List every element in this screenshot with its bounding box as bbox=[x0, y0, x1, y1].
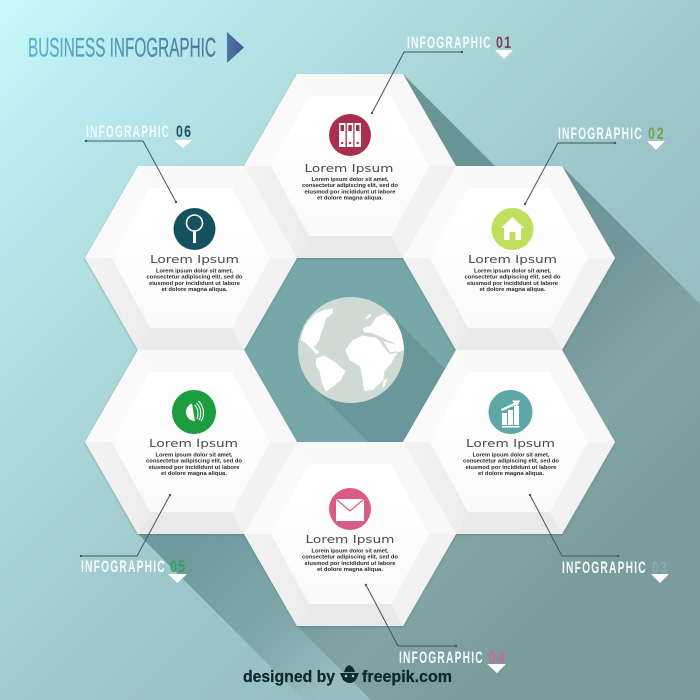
panel 5 bbox=[146, 390, 243, 477]
body text bbox=[464, 268, 561, 293]
panel 2 bbox=[464, 208, 561, 293]
body text: et dolore magna aliqua. bbox=[480, 287, 546, 293]
body text: consectetur adipiscing elit, sed do bbox=[302, 183, 399, 189]
hexagon 3 bbox=[403, 350, 615, 534]
callout 05: INFOGRAPHIC bbox=[81, 558, 165, 576]
callout 05 bbox=[80, 494, 187, 583]
callout 01: INFOGRAPHIC bbox=[407, 34, 491, 52]
body text: consectetur adipiscing elit, sed do bbox=[146, 275, 243, 281]
callout 02 bbox=[524, 125, 665, 205]
body text: eiusmod por incididunt ut labore bbox=[467, 281, 558, 287]
callout 06: 06 bbox=[176, 123, 191, 142]
body text: eiusmod por incididunt ut labore bbox=[148, 465, 240, 471]
body text bbox=[463, 452, 560, 477]
callout 01 bbox=[371, 34, 513, 114]
long shadow: main bbox=[297, 74, 700, 700]
body text: et dolore magna aliqua. bbox=[478, 471, 545, 477]
body text: eiusmod por incididunt ut labore bbox=[304, 561, 396, 567]
body text: Lorem ipsum dolor sit amet, bbox=[474, 268, 552, 274]
heading: Lorem Ipsum bbox=[304, 162, 394, 175]
icon: envelope bbox=[329, 488, 371, 530]
callout 03: 03 bbox=[652, 559, 667, 578]
hexagon 2 bbox=[403, 166, 615, 350]
callout 06 bbox=[85, 123, 192, 203]
body text bbox=[146, 452, 243, 477]
body text bbox=[302, 177, 399, 202]
footer credit bbox=[243, 665, 452, 686]
icon: magnifier bbox=[174, 208, 216, 250]
body text: Lorem ipsum dolor sit amet, bbox=[156, 452, 233, 458]
body text: consectetur adipiscing elit, sed do bbox=[302, 555, 399, 561]
body text: eiusmod por incididunt ut labore bbox=[304, 189, 396, 195]
body text: consectetur adipiscing elit, sed do bbox=[464, 275, 561, 281]
body text: Lorem ipsum dolor sit amet, bbox=[156, 268, 234, 274]
title: BUSINESS INFOGRAPHIC bbox=[28, 32, 216, 62]
icon: house bbox=[492, 208, 534, 250]
body text: Lorem ipsum dolor sit amet, bbox=[472, 452, 550, 458]
hexagon 5 bbox=[85, 350, 297, 534]
long shadow: left tail bbox=[138, 534, 371, 700]
footer credit: designed by bbox=[243, 667, 336, 686]
body text: et dolore magna aliqua. bbox=[317, 567, 384, 573]
body text: consectetur adipiscing elit, sed do bbox=[146, 459, 243, 465]
body text: eiusmod por incididunt ut labore bbox=[466, 465, 556, 471]
icon: freepik logo bbox=[340, 665, 359, 683]
callout 02: 02 bbox=[648, 125, 664, 144]
hexagon 1 bbox=[244, 74, 456, 258]
icon: binders bbox=[329, 114, 371, 156]
hexagon 6 bbox=[85, 166, 297, 350]
hexagon 4 bbox=[244, 442, 456, 626]
body text: et dolore magna aliqua. bbox=[161, 471, 228, 477]
title arrow bbox=[227, 32, 244, 63]
hexagon cluster bbox=[85, 74, 615, 626]
panel 1 bbox=[302, 114, 399, 202]
callout 06: INFOGRAPHIC bbox=[86, 123, 169, 141]
body text: et dolore magna aliqua. bbox=[162, 287, 228, 293]
callout 03: INFOGRAPHIC bbox=[562, 559, 646, 577]
globe shadow bbox=[314, 312, 445, 442]
panel 3 bbox=[463, 390, 560, 477]
heading: Lorem Ipsum bbox=[150, 253, 239, 266]
heading: Lorem Ipsum bbox=[466, 437, 555, 450]
icon: growth chart bbox=[488, 390, 532, 434]
body text bbox=[302, 548, 399, 573]
panel 4 bbox=[302, 488, 399, 573]
globe bbox=[298, 297, 404, 403]
central hole bbox=[244, 258, 456, 442]
body text: Lorem ipsum dolor sit amet, bbox=[312, 177, 389, 183]
callout 02: INFOGRAPHIC bbox=[558, 125, 642, 143]
callout 05: 05 bbox=[170, 558, 185, 577]
callout 04: 04 bbox=[489, 649, 506, 668]
callout 03 bbox=[529, 494, 669, 583]
body text bbox=[146, 268, 243, 293]
heading: Lorem Ipsum bbox=[468, 253, 557, 266]
body text: et dolore magna aliqua. bbox=[317, 196, 384, 202]
body text: consectetur adipiscing elit, sed do bbox=[463, 459, 560, 465]
callout 01: 01 bbox=[496, 34, 511, 53]
icon: signal bbox=[172, 390, 216, 434]
footer credit: freepik.com bbox=[362, 667, 452, 686]
callout 04 bbox=[365, 584, 506, 673]
body text: Lorem ipsum dolor sit amet, bbox=[312, 548, 389, 554]
heading: Lorem Ipsum bbox=[306, 533, 394, 546]
body text: eiusmod por incididunt ut labore bbox=[149, 281, 240, 287]
heading: Lorem Ipsum bbox=[149, 437, 238, 450]
callout 04: INFOGRAPHIC bbox=[399, 649, 483, 667]
panel 6 bbox=[146, 208, 243, 293]
